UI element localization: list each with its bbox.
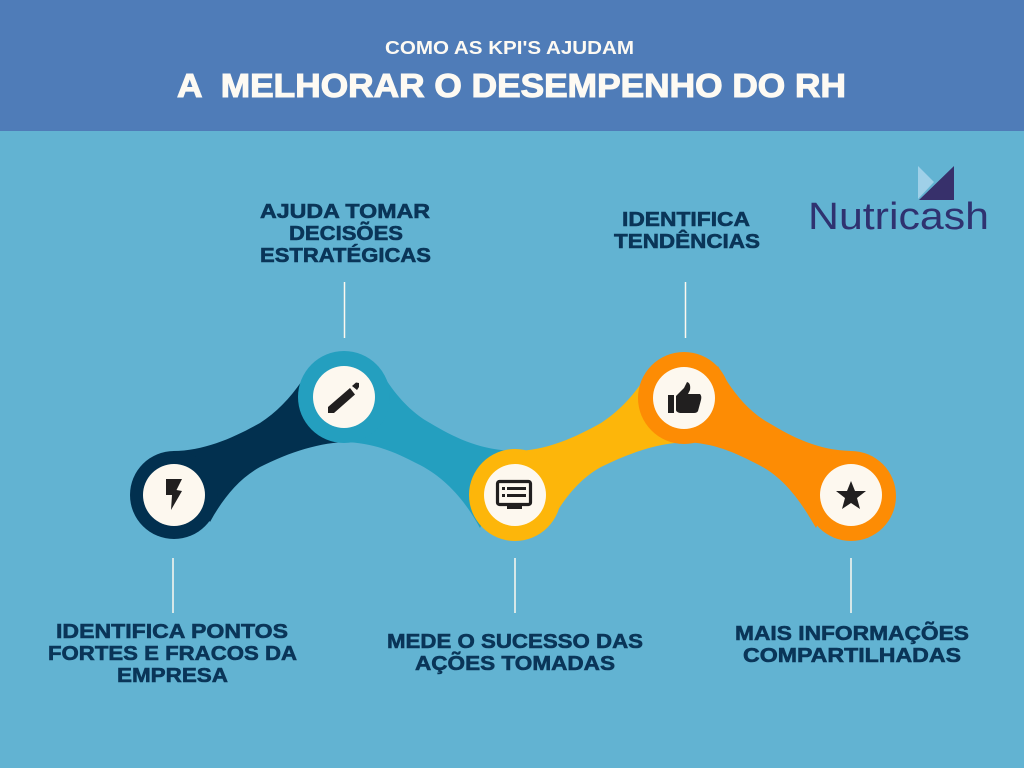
icon: thumbs up xyxy=(653,367,715,429)
text: decisions: AJUDA TOMAR xyxy=(260,200,430,223)
chain diagram xyxy=(130,351,896,541)
subtitle: COMO AS KPI'S AJUDAM xyxy=(385,38,634,58)
icon: pencil xyxy=(313,366,375,428)
text: trends xyxy=(614,208,760,253)
text: information xyxy=(735,621,969,667)
text: decisions xyxy=(260,200,431,267)
connector line: success xyxy=(514,558,516,613)
text: strengths xyxy=(48,620,297,687)
connector line: strengths xyxy=(172,558,174,613)
text: strengths: FORTES E FRACOS DA xyxy=(48,642,297,665)
title: A MELHORAR O DESEMPENHO DO RH xyxy=(177,67,846,104)
logo: Nutricash xyxy=(808,166,989,238)
text: success xyxy=(387,630,643,675)
text: strengths: IDENTIFICA PONTOS xyxy=(56,620,288,643)
text: information: COMPARTILHADAS xyxy=(743,644,961,667)
connector line: trends xyxy=(684,282,686,338)
icon: lightning bolt xyxy=(143,464,205,526)
header banner xyxy=(0,0,1024,131)
text: information: MAIS INFORMAÇÕES xyxy=(735,621,969,645)
icon: star xyxy=(820,464,882,526)
connector line: decisions xyxy=(344,282,346,338)
link: teal xyxy=(298,351,515,528)
text: trends: IDENTIFICA xyxy=(622,208,750,231)
text: decisions: ESTRATÉGICAS xyxy=(260,244,431,267)
text: success: AÇÕES TOMADAS xyxy=(415,651,615,675)
text: trends: TENDÊNCIAS xyxy=(614,229,760,253)
link: orange xyxy=(638,352,896,541)
icon: monitor list xyxy=(484,464,546,526)
logo: Nutricash: Nutricash xyxy=(808,196,989,238)
link: yellow xyxy=(469,368,691,541)
text: success: MEDE O SUCESSO DAS xyxy=(387,630,643,653)
link: dark navy xyxy=(130,368,350,539)
text: strengths: EMPRESA xyxy=(117,664,228,687)
connector line: information xyxy=(850,558,852,613)
text: decisions: DECISÕES xyxy=(289,221,403,245)
